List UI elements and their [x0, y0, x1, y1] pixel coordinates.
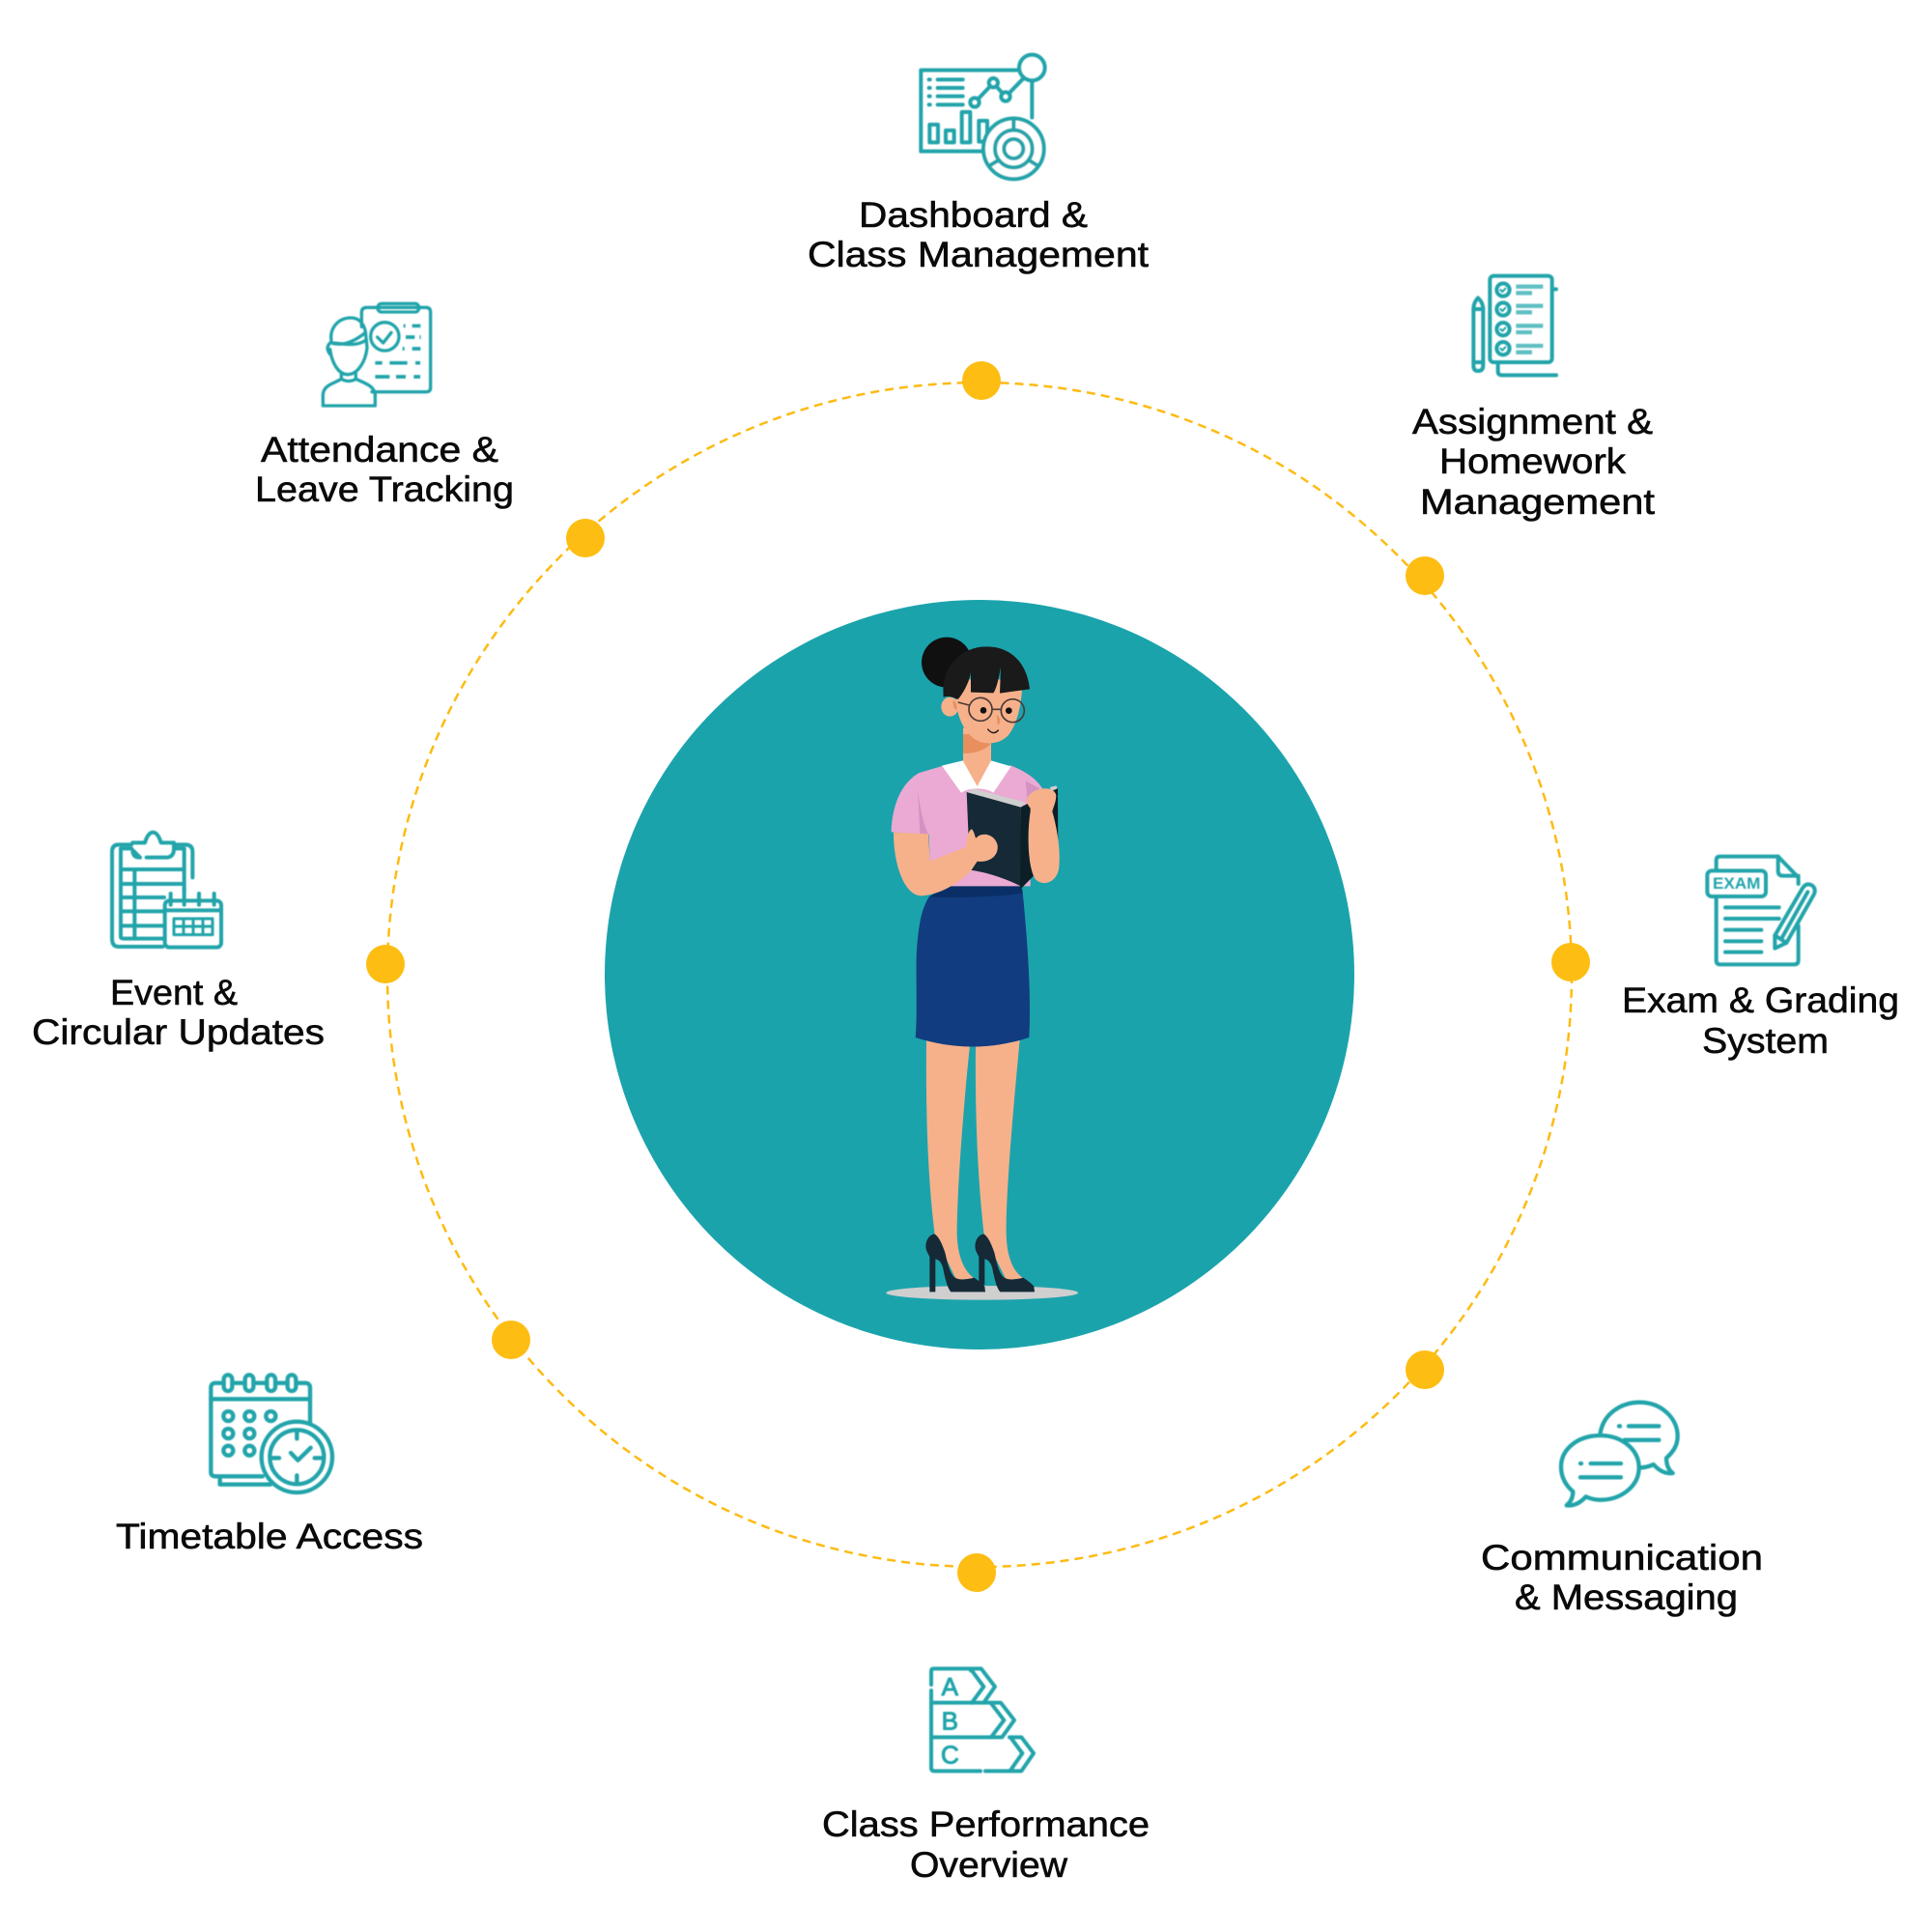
collar	[942, 760, 1011, 793]
label: assignment	[1412, 402, 1656, 522]
icon: clipboard with calendar	[112, 833, 221, 948]
head	[922, 638, 1030, 743]
label: class performance: Overview	[910, 1845, 1067, 1885]
pink shirt	[892, 766, 1042, 886]
label: event: Circular Updates	[32, 1012, 325, 1052]
book	[967, 785, 1058, 890]
label: exam	[1622, 980, 1899, 1061]
label: attendance: Attendance &	[261, 430, 498, 469]
icon: grade chart: A	[942, 1672, 959, 1701]
label: communication: & Messaging	[1515, 1577, 1738, 1617]
label: attendance: Leave Tracking	[255, 469, 514, 509]
feature: class performance	[822, 1668, 1150, 1885]
feature: exam and grading	[1622, 857, 1899, 1061]
icon: exam paper: EXAM	[1713, 874, 1760, 893]
label: class performance	[822, 1804, 1150, 1885]
label: attendance	[255, 430, 514, 509]
arms	[894, 829, 998, 895]
icon: grade chart: B	[942, 1707, 958, 1736]
icon: chat bubbles	[1561, 1403, 1678, 1505]
floor shadow	[886, 1286, 1078, 1300]
icon: grade chart: C	[941, 1740, 959, 1769]
central teal circle	[605, 600, 1354, 1350]
label: exam: System	[1702, 1021, 1829, 1061]
neck	[963, 727, 991, 787]
label: assignment: Management	[1420, 482, 1656, 522]
label: dashboard: Class Management	[808, 235, 1150, 274]
legs and shoes	[925, 1040, 1035, 1292]
feature: communication	[1481, 1403, 1763, 1617]
feature: event and circular updates	[32, 833, 325, 1052]
label: communication: Communication	[1481, 1538, 1763, 1577]
icon: grade chart	[931, 1668, 1034, 1771]
label: timetable: Timetable Access	[116, 1517, 423, 1556]
feature: timetable	[116, 1375, 423, 1556]
label: dashboard: Dashboard &	[859, 195, 1088, 235]
icon: assignment checklist	[1473, 276, 1556, 375]
label: assignment: Homework	[1439, 441, 1627, 481]
skirt	[916, 889, 1030, 1046]
feature: assignment and homework	[1412, 276, 1656, 522]
icon: person with checklist	[323, 303, 431, 406]
feature: dashboard and class management	[808, 55, 1150, 274]
label: event	[32, 973, 325, 1052]
feature: attendance and leave	[255, 303, 514, 509]
icon: calendar with clock	[211, 1375, 332, 1492]
label: communication	[1481, 1538, 1763, 1617]
teacher illustration	[886, 638, 1078, 1300]
icon: exam paper	[1707, 857, 1815, 964]
icon: dashboard	[921, 55, 1045, 179]
label: exam: Exam & Grading	[1622, 980, 1899, 1020]
label: dashboard	[808, 195, 1150, 274]
label: assignment: Assignment &	[1412, 402, 1653, 441]
timeline dots on ring	[366, 361, 1590, 1592]
label: event: Event &	[110, 973, 238, 1012]
label: class performance: Class Performance	[822, 1804, 1150, 1844]
